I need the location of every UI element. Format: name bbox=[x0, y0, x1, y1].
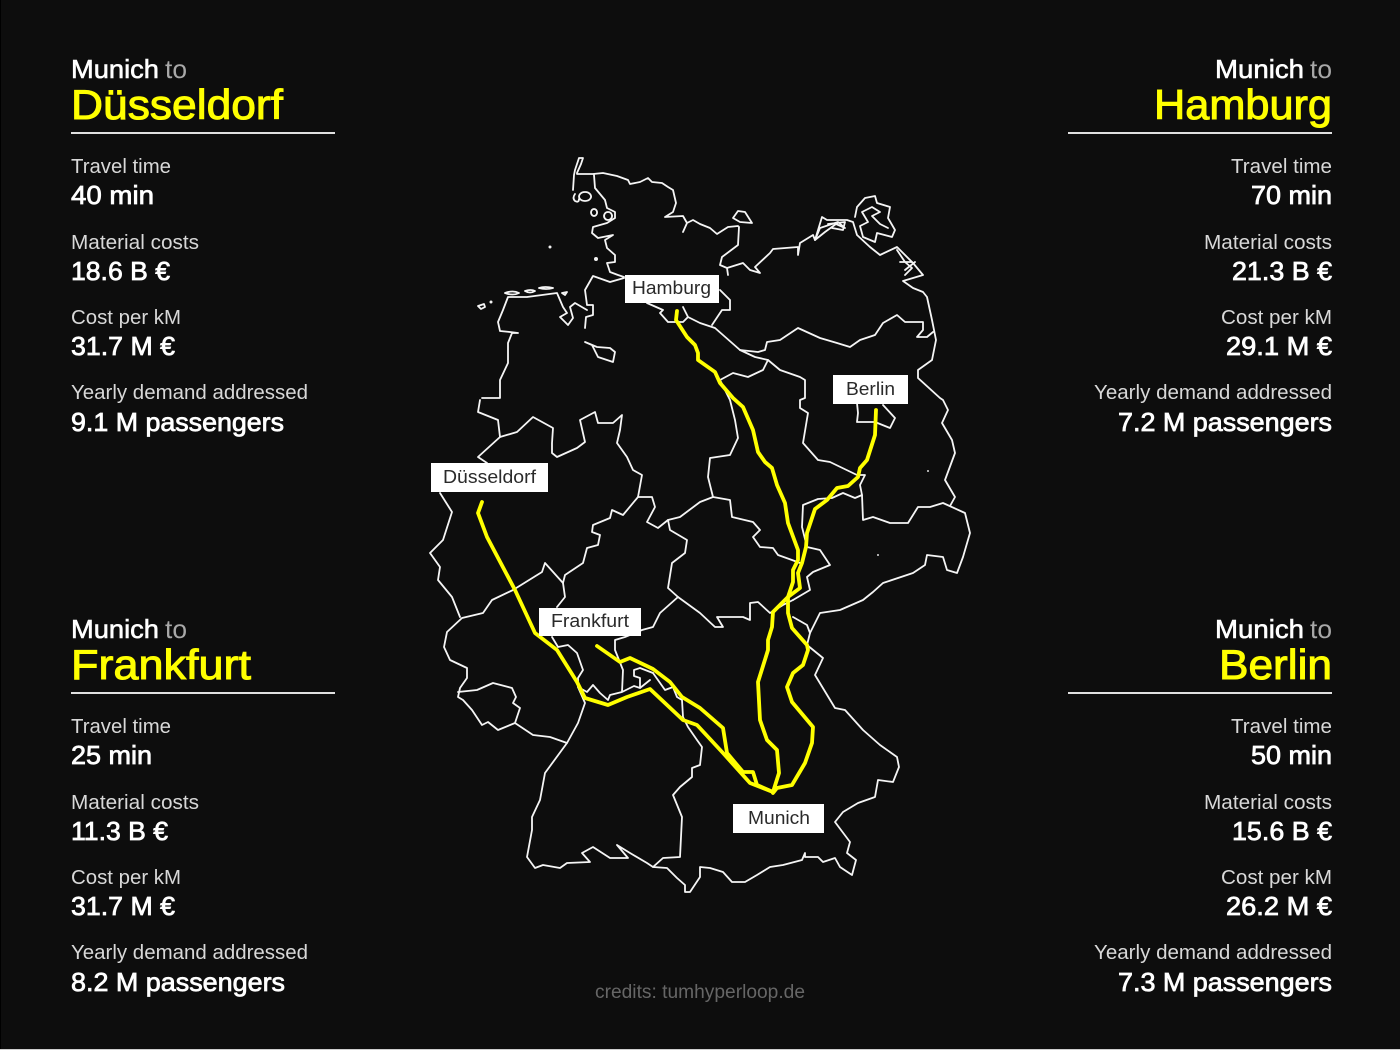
panel: Munich to Berlin bbox=[1068, 614, 1333, 997]
route: Düsseldorf to Munich bbox=[478, 502, 773, 792]
stat: yearly demand: 7.2 M passengers bbox=[1118, 407, 1332, 437]
stat: cost per km: 31.7 M € bbox=[71, 891, 176, 921]
heading: Munich to Berlin: Munich bbox=[1215, 614, 1304, 644]
stat: material costs: 15.6 B € bbox=[1232, 816, 1333, 846]
stat: yearly demand: Yearly demand addressed bbox=[1094, 382, 1332, 404]
heading: Munich to Düsseldorf: Munich bbox=[71, 54, 159, 84]
heading: Munich to Düsseldorf: Düsseldorf bbox=[71, 81, 283, 128]
label: Frankfurt bbox=[539, 608, 641, 636]
stat: travel time: Travel time bbox=[71, 156, 171, 178]
stat: yearly demand: 9.1 M passengers bbox=[71, 407, 284, 437]
stat: cost per km: Cost per kM bbox=[1221, 867, 1332, 889]
stat: material costs: Material costs bbox=[71, 792, 199, 814]
stat: travel time: 40 min bbox=[71, 180, 154, 210]
heading: Munich to Berlin: to bbox=[1310, 614, 1332, 644]
stat: travel time: Travel time bbox=[71, 716, 171, 738]
stat: cost per km: 29.1 M € bbox=[1226, 331, 1333, 361]
stat: cost per km bbox=[1221, 867, 1333, 921]
stat: material costs: 11.3 B € bbox=[71, 816, 169, 846]
route: Berlin to Munich bbox=[758, 410, 876, 792]
heading: Munich to Hamburg bbox=[1154, 54, 1332, 128]
heading: Munich to Hamburg: to bbox=[1310, 54, 1332, 84]
label: Hamburg: Hamburg bbox=[632, 278, 711, 298]
stat: travel time bbox=[1231, 716, 1332, 770]
stat: yearly demand bbox=[1094, 382, 1332, 437]
heading: Munich to Düsseldorf: to bbox=[165, 54, 187, 84]
stat: travel time: Travel time bbox=[1231, 716, 1332, 738]
stat: travel time bbox=[71, 156, 171, 210]
route: Hamburg to Munich bbox=[676, 311, 813, 793]
stat: cost per km: Cost per kM bbox=[71, 867, 181, 889]
credits: credits: tumhyperloop.de bbox=[595, 982, 805, 1003]
stat: cost per km bbox=[71, 867, 181, 921]
route: Frankfurt to Munich bbox=[597, 646, 773, 792]
label: Düsseldorf: Düsseldorf bbox=[443, 467, 537, 487]
stat: cost per km bbox=[71, 307, 181, 361]
heading: Munich to Berlin: Berlin bbox=[1219, 641, 1332, 688]
stat: cost per km: Cost per kM bbox=[1221, 307, 1332, 329]
stat: cost per km: 31.7 M € bbox=[71, 331, 176, 361]
heading: Munich to Hamburg: Munich bbox=[1215, 54, 1304, 84]
heading: Munich to Frankfurt: Frankfurt bbox=[71, 641, 251, 688]
map: Germany state borders bbox=[430, 158, 970, 892]
stat: yearly demand: Yearly demand addressed bbox=[71, 942, 308, 964]
stat: material costs: Material costs bbox=[1204, 792, 1332, 814]
label: Munich bbox=[733, 804, 824, 833]
panel: Munich to Hamburg bbox=[1068, 54, 1333, 437]
stat: material costs: 18.6 B € bbox=[71, 256, 171, 286]
heading: Munich to Hamburg: Hamburg bbox=[1154, 81, 1332, 128]
stat: travel time bbox=[71, 716, 171, 770]
label: Hamburg bbox=[625, 275, 719, 303]
label: Munich: Munich bbox=[748, 808, 810, 828]
stat: material costs bbox=[71, 792, 199, 846]
stat: material costs: 21.3 B € bbox=[1232, 256, 1333, 286]
stat: yearly demand bbox=[1094, 942, 1332, 997]
stat: material costs bbox=[1204, 232, 1333, 286]
label: Frankfurt: Frankfurt bbox=[551, 611, 629, 631]
heading: Munich to Frankfurt bbox=[71, 614, 251, 688]
panel: Munich to Frankfurt bbox=[71, 614, 335, 997]
stat: yearly demand bbox=[71, 942, 308, 997]
stat: travel time: 50 min bbox=[1251, 740, 1332, 770]
stat: travel time: 70 min bbox=[1251, 180, 1332, 210]
stat: travel time: Travel time bbox=[1231, 156, 1332, 178]
heading: Munich to Frankfurt: Munich bbox=[71, 614, 159, 644]
label: Düsseldorf bbox=[431, 463, 548, 492]
stat: yearly demand: 8.2 M passengers bbox=[71, 967, 285, 997]
stat: material costs bbox=[1204, 792, 1333, 846]
stat: material costs bbox=[71, 232, 199, 286]
stat: cost per km bbox=[1221, 307, 1333, 361]
label: Berlin bbox=[833, 375, 908, 404]
stat: yearly demand bbox=[71, 382, 308, 437]
stat: yearly demand: Yearly demand addressed bbox=[71, 382, 308, 404]
stat: yearly demand: Yearly demand addressed bbox=[1094, 942, 1332, 964]
heading: Munich to Frankfurt: to bbox=[165, 614, 187, 644]
stat: cost per km: Cost per kM bbox=[71, 307, 181, 329]
stat: yearly demand: 7.3 M passengers bbox=[1118, 967, 1332, 997]
stat: material costs: Material costs bbox=[1204, 232, 1332, 254]
heading: Munich to Düsseldorf bbox=[71, 54, 283, 128]
stat: material costs: Material costs bbox=[71, 232, 199, 254]
heading: Munich to Berlin bbox=[1215, 614, 1332, 688]
stat: travel time: 25 min bbox=[71, 740, 152, 770]
panel: Munich to Düsseldorf bbox=[71, 54, 335, 437]
label: Berlin: Berlin bbox=[846, 379, 895, 399]
stat: travel time bbox=[1231, 156, 1332, 210]
stat: cost per km: 26.2 M € bbox=[1226, 891, 1333, 921]
